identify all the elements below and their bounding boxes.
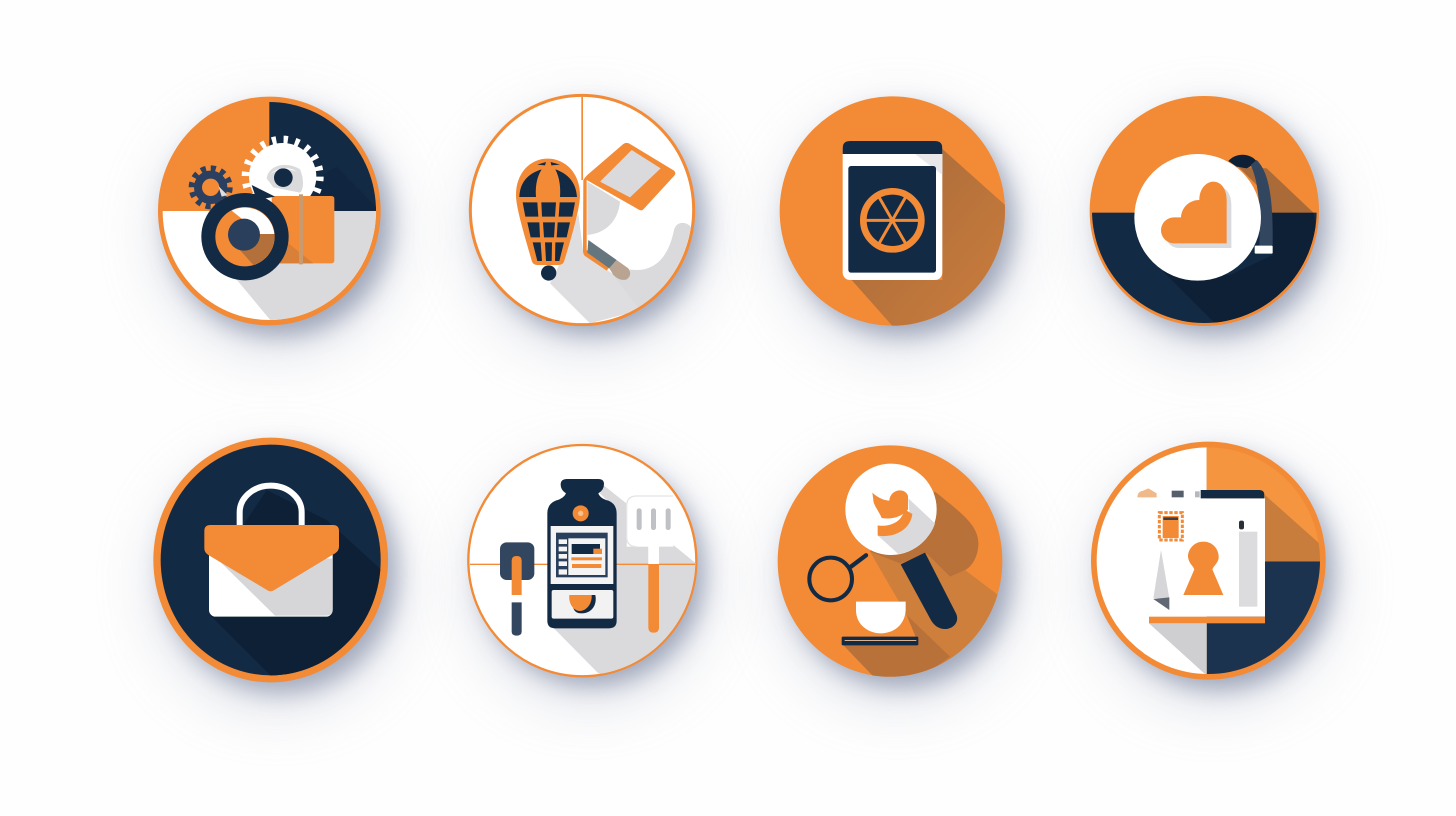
soft shadow [159,110,393,350]
soft shadow [472,460,706,700]
icon: navy bar [842,637,918,645]
quadrants [1096,447,1320,674]
panel: balloon and book icon [470,95,705,349]
icon: envelope flap [204,525,339,591]
icon: left spatula [500,542,534,636]
icon: camera lens [201,185,289,280]
icon: grey column [1239,521,1257,607]
icon: small navy gear [192,169,229,206]
white circle [845,464,937,555]
soft shadow [780,459,1013,700]
icon: envelope body [209,538,333,617]
icon: grey cone [1153,550,1169,610]
panel: heart cloud icon [1080,96,1333,349]
divider line [581,97,583,180]
long shadow [210,490,393,678]
long shadow [852,149,1005,326]
ring [470,95,694,325]
icon: right spatula [627,496,673,633]
icon: shackle [240,486,302,527]
document page [1137,488,1265,623]
panel: padlock envelope icon [153,438,399,707]
white circle [1134,154,1261,281]
panel: document with keyhole icon [1080,430,1340,703]
icon: bird [872,490,912,536]
icon: heart cloud shadow [1166,186,1231,248]
icon: bottle [547,479,617,628]
orange ring [158,97,381,325]
icon: orange wheel [863,191,921,249]
soft shadow [156,451,399,707]
orange ring [1091,442,1326,680]
soft shadow [1096,456,1334,703]
long shadows [554,486,696,674]
long shadows [550,182,697,323]
quadrant background [162,102,376,320]
panel: bird, magnifier and bowl icon [778,445,1013,700]
panel: bottle and spatulas icon [468,445,713,700]
icon: keyhole figure [1183,542,1223,595]
soft shadow [782,110,1016,350]
horizontal line [470,564,695,565]
orange disc [780,96,1005,326]
icon: heart cloud [1161,182,1227,243]
icon: camera body [272,194,334,264]
orange disc [1090,96,1319,326]
soft shadow [472,109,705,349]
navy lower half [1092,167,1317,323]
circle shadow [878,498,935,554]
orange disc [778,445,1002,677]
orange ring [153,438,388,682]
icon: large white gear [246,140,320,214]
icon: balloon [516,159,580,265]
icon: balloon weight [541,265,556,281]
long shadows [844,492,998,677]
icon: small orange window [1159,513,1182,540]
navy disc [161,445,381,675]
icon: white bowl [856,602,906,633]
icon: tablet [843,141,942,280]
icon: open book [583,143,675,280]
icon: strap [1228,155,1273,254]
ring [468,445,696,676]
soft shadow [1094,109,1328,349]
icon: navy handle [901,553,957,629]
panel: tablet with wheel icon [780,96,1016,350]
icon: magnifier [809,555,866,600]
panel: camera and gears icon [140,80,407,350]
